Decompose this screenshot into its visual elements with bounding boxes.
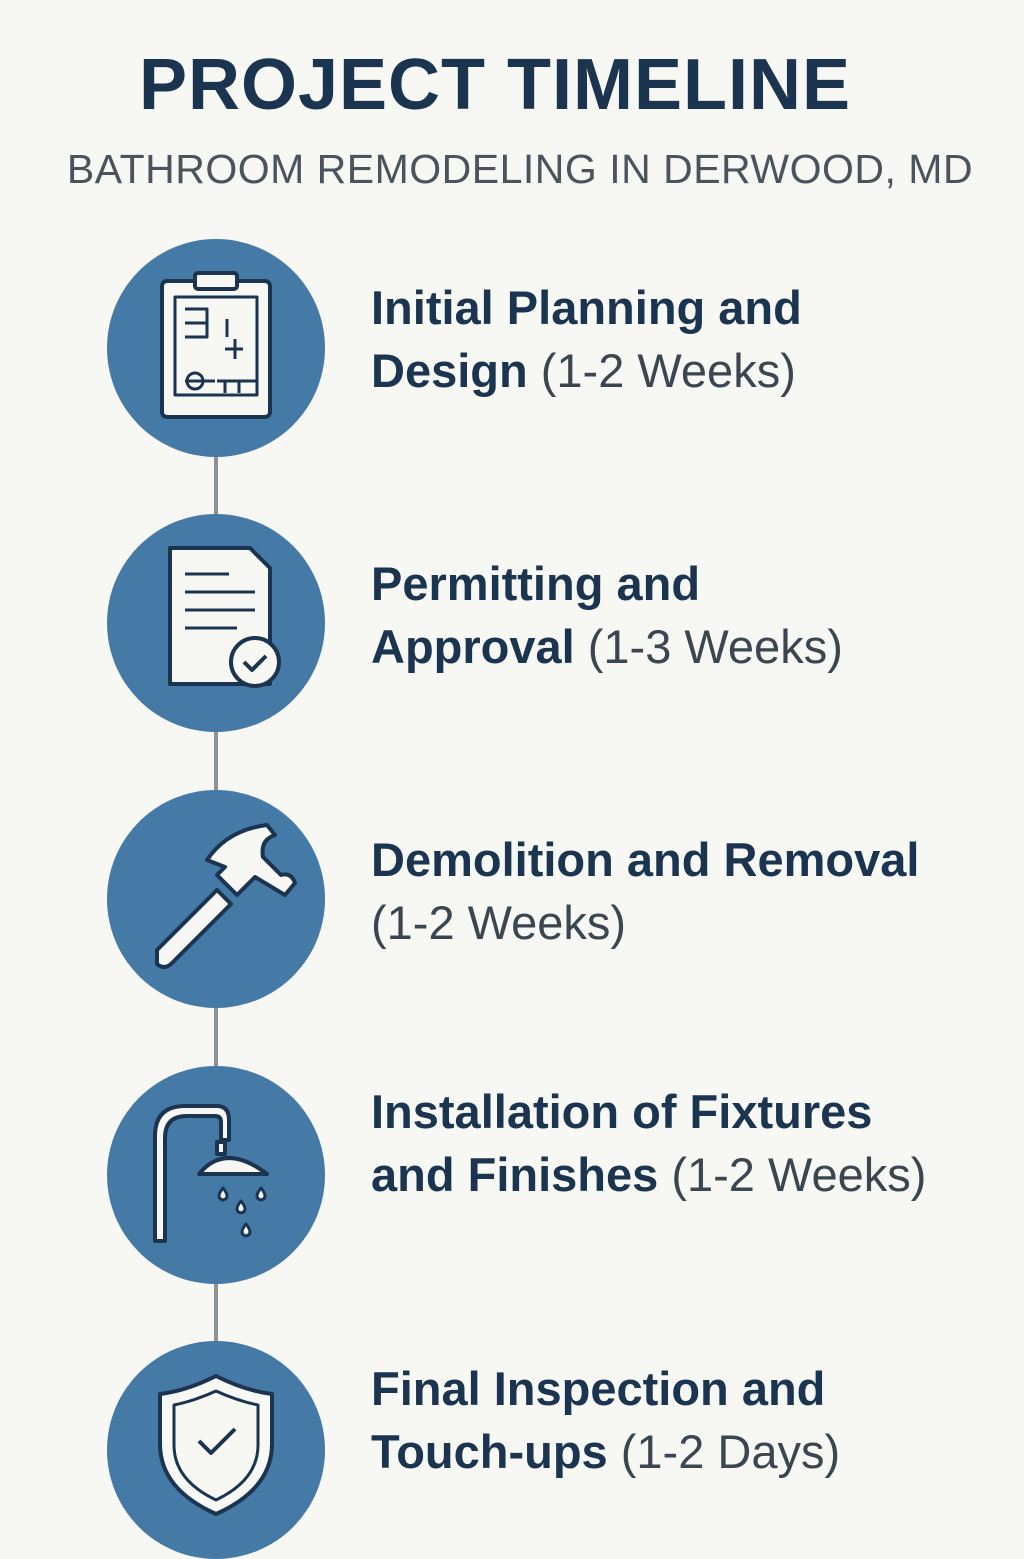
step 2 text: Approval (1-3 Weeks) — [371, 620, 843, 673]
step 1 text — [371, 281, 802, 397]
step 2 text: Permitting and — [371, 557, 700, 610]
step 3 text: (1-2 Weeks) — [371, 896, 626, 949]
step 3 icon: hammer — [107, 790, 325, 1008]
step 5 icon: shield check — [107, 1341, 325, 1559]
step 4 text: Installation of Fixtures — [371, 1085, 872, 1138]
step 2 icon: document check — [107, 514, 325, 732]
step 5 text: Touch-ups (1-2 Days) — [371, 1425, 840, 1478]
subtitle: BATHROOM REMODELING IN DERWOOD, MD — [67, 146, 973, 192]
title: PROJECT TIMELINE — [139, 45, 851, 125]
step 4 text — [371, 1085, 926, 1201]
step 1 text: Initial Planning and — [371, 281, 802, 334]
step 1 text: Design (1-2 Weeks) — [371, 344, 796, 397]
step 4 text: and Finishes (1-2 Weeks) — [371, 1148, 926, 1201]
step 2 text — [371, 557, 843, 673]
step 5 text: Final Inspection and — [371, 1362, 825, 1415]
step 3 text: Demolition and Removal — [371, 833, 919, 886]
step 3 text — [371, 833, 919, 949]
step 5 text — [371, 1362, 840, 1478]
step 1 icon: clipboard plan — [107, 239, 325, 457]
step 4 icon: shower — [107, 1066, 325, 1284]
